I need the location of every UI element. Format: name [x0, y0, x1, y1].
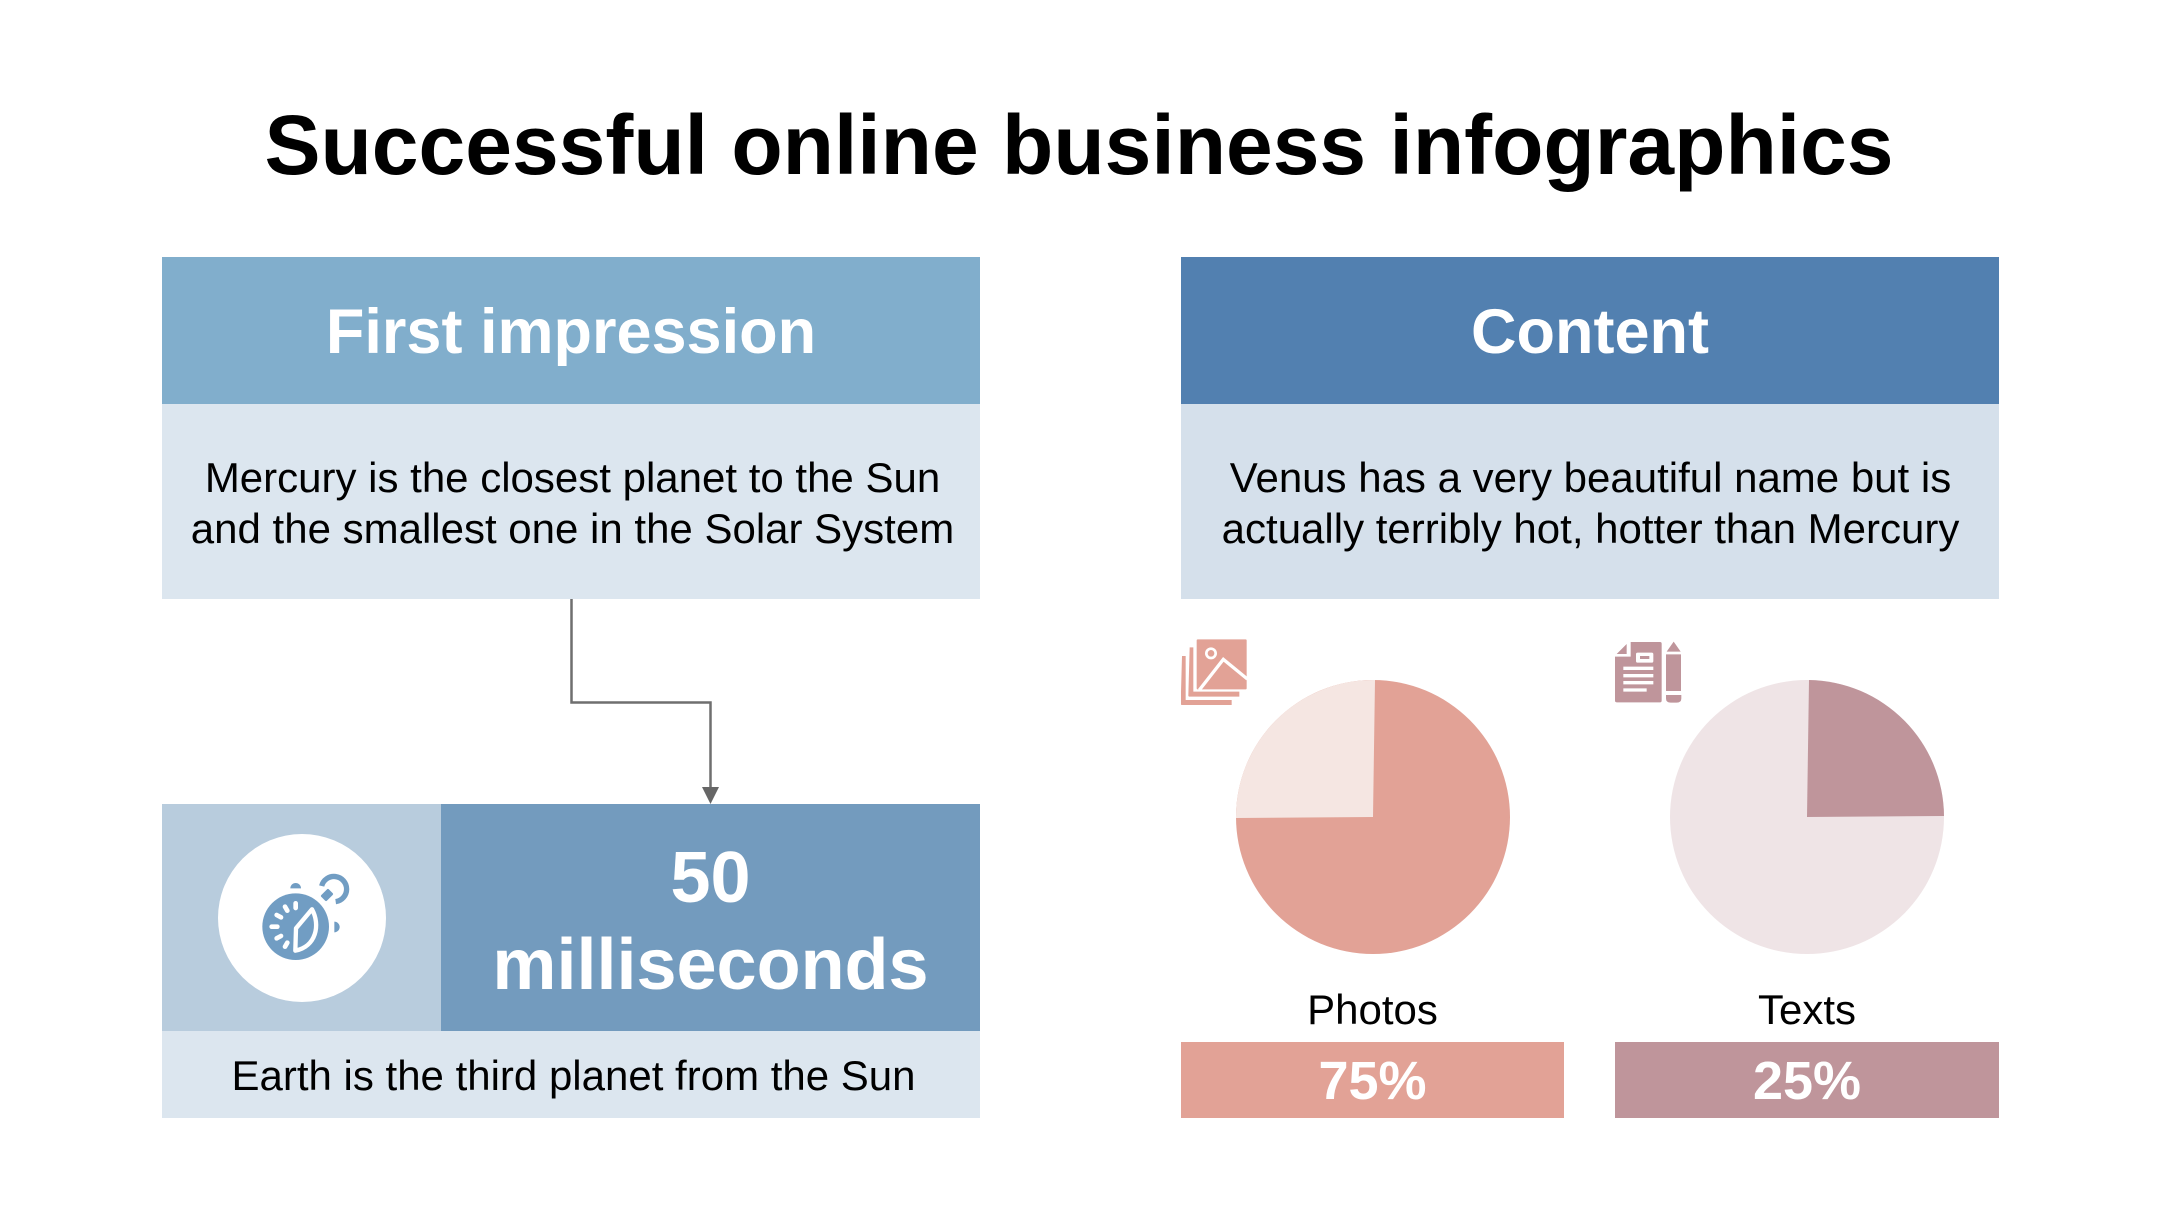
text: venus: Venus has a very beautiful name but is [1230, 454, 1951, 501]
label: texts: Texts [1758, 986, 1856, 1033]
stat: 50 milliseconds: 50 [670, 838, 751, 918]
heading: content [1181, 257, 1999, 404]
text: earth: Earth is the third planet from the Sun [231, 1052, 916, 1098]
panel: 50 milliseconds [162, 804, 980, 1118]
text: earth [162, 1031, 980, 1118]
text: venus [1181, 404, 1999, 599]
stat: 50 milliseconds [441, 804, 980, 1031]
stat: 25%: 25% [1753, 1051, 1861, 1111]
text: mercury: and the smallest one in the Solar System [191, 505, 954, 552]
title: Successful online business infographics [264, 98, 1894, 192]
text: venus: actually terribly hot, hotter than Mercury [1222, 505, 1959, 552]
heading: first impression [162, 257, 980, 404]
pie: 75% [1236, 680, 1510, 954]
icon: texts [1615, 642, 1682, 703]
heading: content: Content [1471, 297, 1709, 367]
text: mercury [162, 404, 980, 599]
stat: 75% [1181, 1042, 1564, 1118]
heading: first impression: First impression [326, 297, 816, 367]
chart: photos [1181, 639, 1564, 1118]
panel: first impression [162, 257, 980, 599]
icon tile [162, 804, 441, 1031]
icon: photos [1181, 639, 1247, 705]
pie: 25% [1670, 680, 1944, 954]
stat: 25% [1615, 1042, 1999, 1118]
label: photos: Photos [1307, 986, 1438, 1033]
icon: stopwatch [218, 834, 386, 1002]
text: mercury: Mercury is the closest planet to the Sun [205, 454, 940, 501]
stat: 75%: 75% [1318, 1051, 1427, 1111]
panel: content [1181, 257, 1999, 599]
chart: texts [1615, 642, 1999, 1118]
stat: 50 milliseconds: milliseconds [492, 925, 929, 1005]
